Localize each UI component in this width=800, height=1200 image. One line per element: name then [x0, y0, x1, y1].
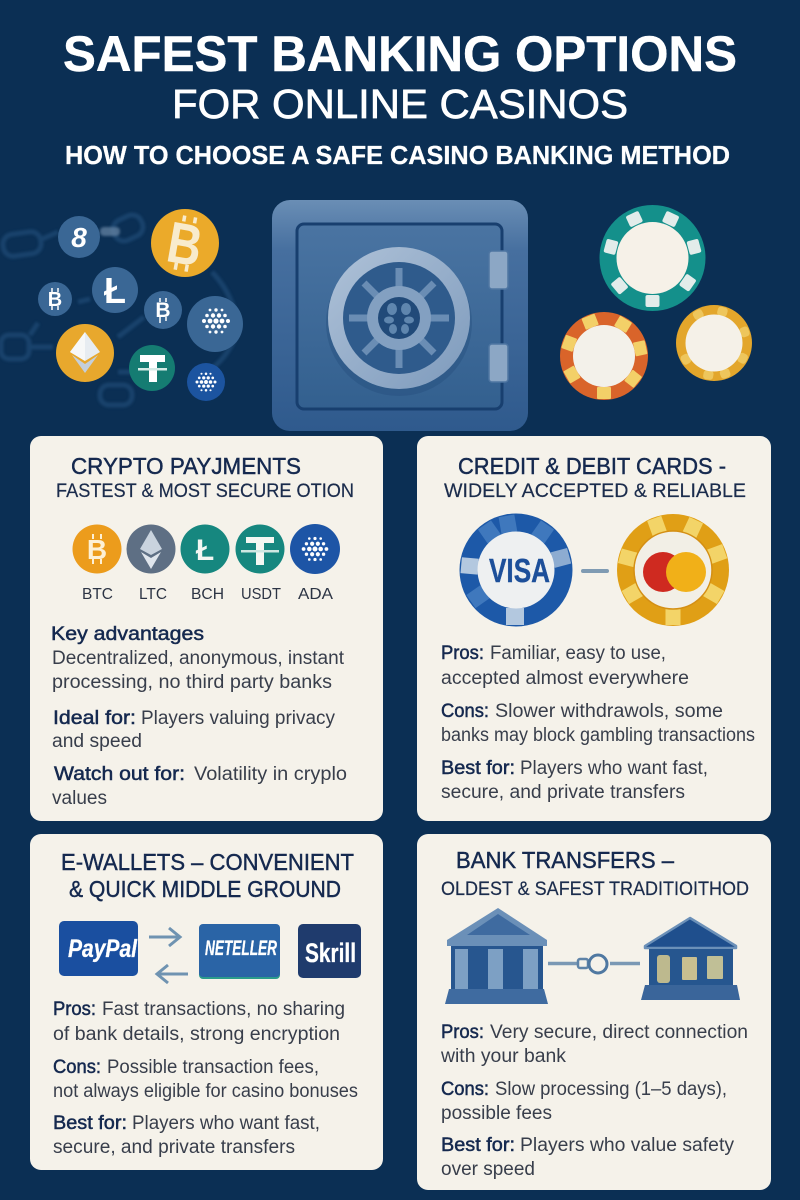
coin labels: BCH [191, 586, 224, 603]
coin: litecoin [92, 267, 138, 313]
text: best for [53, 1112, 320, 1158]
text: best for: secure, and private transfers [53, 1137, 295, 1158]
logo: PayPal: PayPal [68, 935, 138, 963]
text: cons: Cons: [441, 700, 489, 722]
coin: infinity: 8 [71, 222, 87, 253]
heading: bank transfers [441, 847, 749, 900]
text: pros: Fast transactions, no sharing [102, 999, 345, 1020]
icon: BTC: B [87, 534, 107, 565]
text: pros [53, 998, 345, 1045]
text: cons [441, 1078, 727, 1124]
heading: crypto payments: FASTEST & MOST SECURE OTION [56, 481, 354, 502]
coin: bitcoin large: B [162, 210, 207, 279]
coin labels [82, 586, 333, 603]
heading: bank transfers: BANK TRANSFERS – [456, 847, 674, 873]
icon: mastercard chip [617, 514, 729, 626]
text: best for: Players who want fast, [520, 758, 708, 779]
logo: Neteller: NETELLER [205, 937, 278, 960]
icon: left bank [445, 908, 548, 1004]
coin labels: ADA [298, 586, 333, 603]
icon: link connector [548, 955, 640, 973]
heading: bank transfers: OLDEST & SAFEST TRADITIOITHOD [441, 879, 749, 900]
heading: e-wallets [61, 849, 354, 902]
heading: credit and debit cards [444, 453, 746, 502]
text: pros: Pros: [441, 1021, 484, 1043]
text: cons [53, 1056, 358, 1102]
text: key advantages: Decentralized, anonymous, instant [52, 648, 345, 669]
title: SAFEST BANKING OPTIONS [63, 26, 737, 82]
connector dash [581, 569, 609, 573]
text: pros [440, 1021, 748, 1067]
chain highlight [100, 227, 120, 236]
coin: bitcoin small right [144, 291, 182, 329]
icon: BTC [72, 524, 122, 574]
panel: credit and debit cards [417, 436, 771, 821]
coin: cardano large [187, 296, 243, 352]
panel: e-wallets [30, 834, 383, 1170]
illustration: vault safe [272, 200, 528, 431]
coin labels: LTC [139, 586, 167, 603]
icon: visa chip [460, 514, 572, 626]
text: cons: Slow processing (1–5 days), [495, 1079, 727, 1100]
text: pros: Pros: [53, 998, 96, 1020]
casino chips [560, 205, 752, 400]
icon: ADA [290, 524, 340, 574]
chip: orange [560, 312, 648, 400]
text: ideal for: and speed [52, 731, 142, 752]
arrow: left [157, 965, 188, 983]
text: best for: Best for: [53, 1112, 127, 1134]
logo: Skrill [298, 924, 361, 978]
coin labels: BTC [82, 586, 113, 603]
title: FOR ONLINE CASINOS [172, 81, 628, 127]
text: key advantages: Key advantages [51, 623, 204, 645]
text: best for: Players who want fast, [132, 1113, 320, 1134]
arrow: right [149, 928, 180, 946]
logo: Neteller [199, 924, 280, 979]
text: best for [441, 1134, 734, 1180]
coin: litecoin: Ł [104, 270, 126, 311]
logo: Skrill: Skrill [305, 938, 356, 968]
coin: tether [129, 345, 175, 391]
text: watch out for [52, 763, 347, 809]
text: best for: Best for: [441, 757, 515, 779]
text: best for: over speed [441, 1159, 535, 1180]
coin: bitcoin small left [38, 282, 72, 316]
heading: e-wallets: & QUICK MIDDLE GROUND [69, 876, 341, 902]
heading: crypto payments [56, 453, 354, 502]
safe dial [326, 247, 472, 396]
text: pros: accepted almost everywhere [441, 668, 689, 689]
coin labels: USDT [241, 586, 281, 603]
text: cons: Slower withdrawols, some [495, 701, 723, 722]
text: watch out for: Watch out for: [54, 763, 185, 785]
title: HOW TO CHOOSE A SAFE CASINO BANKING METHOD [65, 140, 730, 170]
chip: yellow [676, 305, 752, 381]
coin: ethereum [56, 324, 114, 382]
coin: bitcoin small right: B [155, 299, 171, 322]
text: watch out for: values [52, 788, 107, 809]
text: ideal for [52, 707, 335, 752]
crypto coin cluster [38, 209, 243, 401]
text: pros: Familiar, easy to use, [490, 643, 666, 664]
icon: BCH [180, 524, 230, 574]
panel: bank transfers [417, 834, 771, 1190]
text: best for: Players who value safety [520, 1135, 734, 1156]
text: pros [441, 642, 689, 689]
heading: credit and debit cards: CREDIT & DEBIT CARDS - [458, 453, 726, 479]
title [63, 26, 737, 170]
text: pros: of bank details, strong encryption [53, 1024, 340, 1045]
icon: USDT [236, 524, 284, 574]
text: best for: Best for: [441, 1134, 515, 1156]
icon: visa chip: VISA [489, 552, 550, 589]
text: cons: Cons: [441, 1078, 489, 1100]
icon: LTC [126, 524, 176, 574]
text: best for [441, 757, 708, 803]
logo: PayPal [59, 921, 138, 976]
chip: teal [600, 205, 706, 311]
text: cons: Cons: [53, 1056, 101, 1078]
faint chain decoration [1, 212, 236, 405]
coin: cardano small [187, 363, 225, 401]
text: cons: possible fees [441, 1103, 552, 1124]
heading: e-wallets: E-WALLETS – CONVENIENT [61, 849, 354, 875]
icon: right bank [641, 918, 740, 1000]
text: cons [441, 700, 755, 746]
text: ideal for: Players valuing privacy [141, 708, 335, 729]
text: best for: secure, and private transfers [441, 782, 685, 803]
text: pros: Pros: [441, 642, 484, 664]
text: pros: with your bank [440, 1046, 567, 1067]
heading: credit and debit cards: WIDELY ACCEPTED & RELIABLE [444, 481, 746, 502]
text: pros: Very secure, direct connection [490, 1022, 748, 1043]
coin: infinity [58, 216, 100, 258]
text: key advantages: processing, no third party banks [52, 672, 332, 693]
coin: bitcoin small left: B [48, 289, 62, 311]
safe hinges [489, 251, 508, 382]
panel: crypto payments [30, 436, 383, 821]
text: watch out for: Volatility in cryplo [194, 764, 347, 785]
text: cons: banks may block gambling transactions [441, 725, 755, 746]
text: ideal for: Ideal for: [53, 707, 136, 729]
icon: BCH: Ł [196, 534, 214, 567]
text: cons: not always eligible for casino bonuses [53, 1081, 358, 1102]
heading: crypto payments: CRYPTO PAYJMENTS [71, 453, 301, 479]
text: key advantages [51, 623, 345, 693]
text: cons: Possible transaction fees, [107, 1057, 319, 1078]
